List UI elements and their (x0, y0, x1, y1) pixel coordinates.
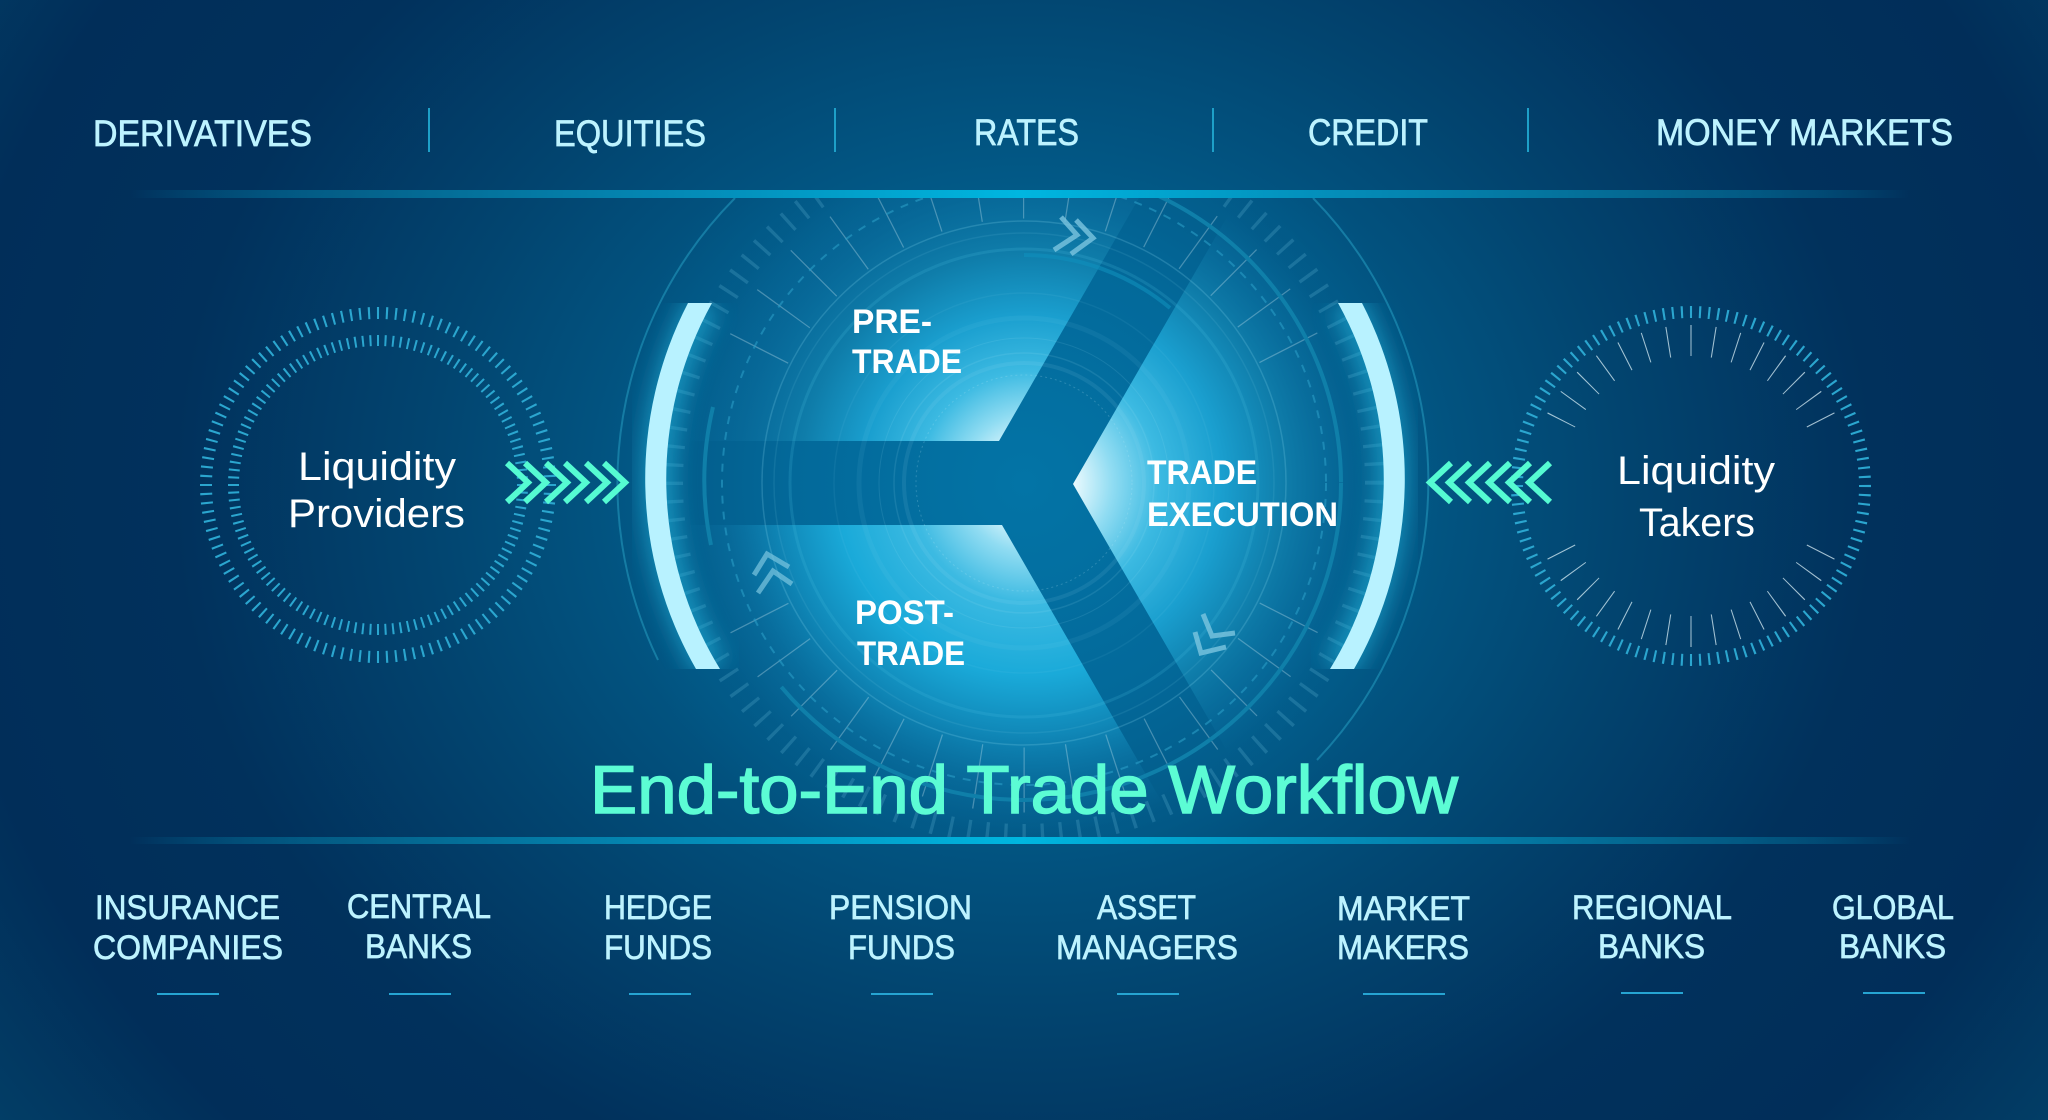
outer tick ring (1517, 312, 1865, 660)
bracket: left (645, 303, 720, 669)
liquidity takers circle (1517, 312, 1865, 660)
arrows: takers to workflow (1430, 463, 1550, 502)
asset class: equities: EQUITIES (554, 113, 706, 154)
inner tick ring (234, 340, 522, 630)
participant: central banks: CENTRAL (347, 888, 491, 926)
participant: regional banks (1572, 889, 1732, 994)
label: liquidity takers: Takers (1639, 501, 1755, 545)
asset class: credit: CREDIT (1308, 112, 1428, 153)
arrows: providers to workflow (507, 463, 625, 502)
label: trade execution: EXECUTION (1147, 496, 1338, 534)
bottom band (130, 837, 1910, 844)
participant: regional banks: BANKS (1598, 928, 1705, 966)
participant: market makers (1337, 890, 1470, 995)
segment: post-trade (690, 525, 1182, 837)
inner white ticks (1546, 340, 1836, 632)
top band (130, 190, 1910, 198)
participant: hedge funds: HEDGE (604, 889, 712, 927)
participant: hedge funds: FUNDS (604, 929, 712, 967)
label: trade execution (1147, 454, 1338, 534)
outer tick ring (206, 313, 550, 657)
icon: small chevrons top (1054, 217, 1093, 254)
icon: small chevrons left (754, 554, 792, 593)
label: pre-trade: PRE- (852, 303, 932, 341)
title: End-to-End Trade Workflow (590, 752, 1459, 828)
label: trade execution: TRADE (1147, 454, 1257, 492)
participant: market makers: MARKET (1337, 890, 1470, 928)
icon: small chevrons right (1195, 614, 1235, 653)
label: pre-trade (852, 303, 962, 381)
label: post-trade: TRADE (857, 635, 965, 673)
dial rings and ticks (617, 131, 1428, 835)
asset class: rates: RATES (974, 112, 1079, 153)
participant: central banks (347, 888, 491, 995)
participant: global banks: GLOBAL (1832, 889, 1954, 927)
participant: regional banks: REGIONAL (1572, 889, 1732, 927)
bracket glow (659, 303, 1391, 669)
segment: trade execution (1073, 198, 1400, 770)
participant: asset managers: MANAGERS (1056, 929, 1238, 967)
liquidity providers circle (206, 313, 550, 657)
label: liquidity providers (288, 445, 465, 536)
dial base disc (758, 198, 1209, 750)
participant: hedge funds (604, 889, 712, 995)
label: pre-trade: TRADE (852, 343, 962, 381)
label: liquidity providers: Liquidity (298, 445, 456, 489)
label: liquidity providers: Providers (288, 492, 465, 536)
segment: pre-trade (690, 198, 1139, 441)
participant: asset managers: ASSET (1097, 889, 1196, 927)
participant: global banks (1832, 889, 1954, 994)
asset class: derivatives: DERIVATIVES (93, 113, 312, 154)
participant: central banks: BANKS (365, 928, 472, 966)
participant: insurance companies: COMPANIES (93, 929, 283, 967)
asset class: money markets: MONEY MARKETS (1656, 112, 1953, 153)
participant: market makers: MAKERS (1337, 929, 1469, 967)
participant: pension funds: PENSION (829, 889, 972, 927)
label: liquidity takers (1617, 449, 1775, 545)
label: post-trade: POST- (855, 594, 954, 632)
label: post-trade (855, 594, 965, 673)
participant: pension funds: FUNDS (848, 929, 955, 967)
central workflow dial (616, 198, 1430, 837)
participant: asset managers (1056, 889, 1238, 995)
participant: insurance companies (93, 889, 283, 995)
market participants row (93, 888, 1954, 995)
participant: global banks: BANKS (1839, 928, 1946, 966)
label: liquidity takers: Liquidity (1617, 449, 1775, 493)
participant: pension funds (829, 889, 972, 995)
asset class dividers (428, 108, 1529, 152)
bracket: right (1330, 303, 1405, 669)
asset classes row (93, 112, 1953, 154)
participant: insurance companies: INSURANCE (95, 889, 280, 927)
